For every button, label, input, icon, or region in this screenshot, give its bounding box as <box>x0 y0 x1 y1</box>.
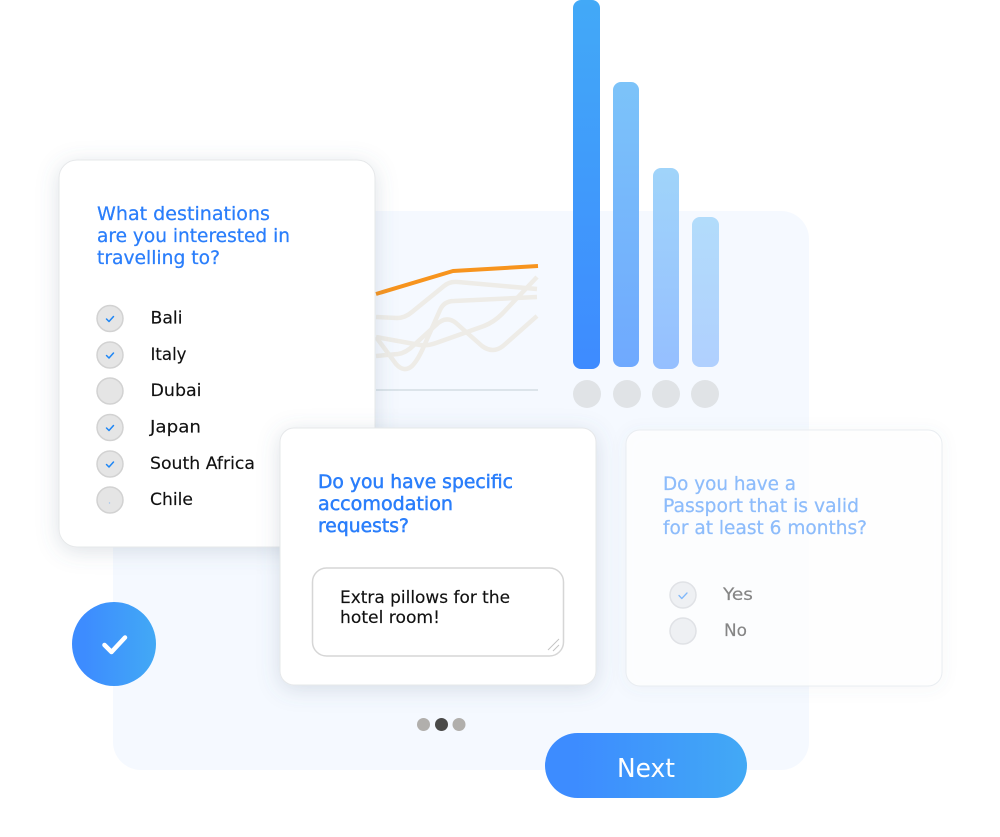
text area <box>312 568 564 656</box>
pagination dots <box>417 718 466 731</box>
heading: passport question: for at least 6 months? <box>663 517 867 539</box>
heading: destinations question <box>97 203 290 269</box>
text area: Extra pillows for the <box>340 588 510 608</box>
heading: destinations question: travelling to? <box>97 247 220 269</box>
next button <box>545 733 747 798</box>
line chart <box>376 266 538 390</box>
yes / no options: No <box>724 621 747 641</box>
heading: accommodation question <box>318 471 513 537</box>
option list: Italy <box>150 345 186 365</box>
heading: passport question: Passport that is valid <box>663 495 859 517</box>
heading: accommodation question: accomodation <box>318 493 453 515</box>
panel: destinations question card <box>59 160 375 547</box>
heading: accommodation question: Do you have specific <box>318 471 513 493</box>
text area: hotel room! <box>340 608 440 628</box>
background panel <box>113 211 809 770</box>
option list: Chile <box>150 490 193 510</box>
panel: passport question card <box>626 430 942 686</box>
yes / no options <box>670 582 753 644</box>
panel: accommodation question card <box>280 428 596 685</box>
next button: Next <box>617 754 675 784</box>
heading: destinations question: are you interested in <box>97 225 290 247</box>
bar chart <box>573 0 719 408</box>
heading: passport question <box>663 473 867 539</box>
heading: accommodation question: requests? <box>318 515 409 537</box>
option list: South Africa <box>150 454 255 474</box>
heading: destinations question: What destinations <box>97 203 270 225</box>
icon: check badge <box>72 602 156 686</box>
option list <box>97 306 255 513</box>
option list: Japan <box>149 418 201 438</box>
yes / no options: Yes <box>722 585 753 605</box>
heading: passport question: Do you have a <box>663 473 796 495</box>
option list: Dubai <box>150 381 202 401</box>
option list: Bali <box>150 308 182 328</box>
